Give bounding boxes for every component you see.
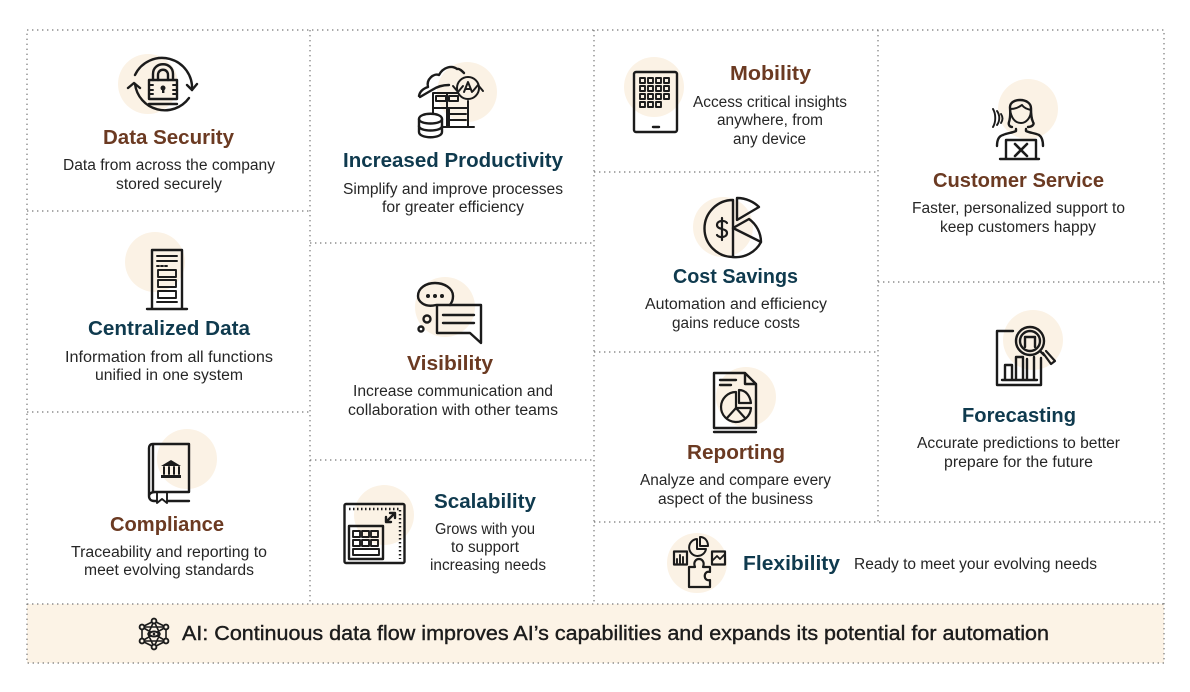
description: any device <box>733 131 806 148</box>
description <box>645 296 827 332</box>
description: aspect of the business <box>658 491 813 508</box>
heading: Centralized Data <box>88 318 251 340</box>
description: Traceability and reporting to <box>71 544 267 561</box>
heading: Reporting <box>687 442 785 464</box>
description: unified in one system <box>95 367 243 384</box>
heading: Mobility <box>730 63 812 85</box>
icon: scaling window <box>344 504 404 563</box>
panel: customer service <box>912 79 1125 236</box>
heading: Data Security <box>103 127 235 149</box>
description <box>348 383 558 419</box>
description: meet evolving standards <box>84 562 254 579</box>
heading: Visibility <box>407 353 494 375</box>
heading: Scalability <box>434 491 537 513</box>
icon: padlock with circular arrows <box>128 58 197 110</box>
description <box>693 94 847 148</box>
panel: centralized data <box>65 232 273 384</box>
AI banner background <box>27 604 1164 663</box>
icon: support agent <box>993 100 1043 159</box>
description <box>917 435 1120 471</box>
panel: reporting <box>640 367 831 508</box>
heading: Customer Service <box>933 170 1104 192</box>
description: Data from across the company <box>63 157 275 174</box>
description: Access critical insights <box>693 94 847 111</box>
heading: Increased Productivity <box>343 150 564 172</box>
description: anywhere, from <box>717 112 823 129</box>
description: collaboration with other teams <box>348 402 558 419</box>
description <box>912 200 1125 236</box>
panel: cost savings <box>645 197 827 332</box>
heading: Forecasting <box>962 405 1076 427</box>
description <box>640 472 831 508</box>
banner text: AI: Continuous data flow improves AI’s capabilities and expands its potential for automation <box>182 622 1049 645</box>
icon: cloud warehouse with database <box>419 67 483 137</box>
heading: Compliance <box>110 514 224 536</box>
description: for greater efficiency <box>382 199 524 216</box>
description: Analyze and compare every <box>640 472 831 489</box>
description: Ready to meet your evolving needs <box>854 556 1097 573</box>
description: prepare for the future <box>944 454 1093 471</box>
panel: forecasting <box>917 310 1120 471</box>
icon: tablet <box>634 72 677 132</box>
description: Faster, personalized support to <box>912 200 1125 217</box>
description: Information from all functions <box>65 349 273 366</box>
icon: AI network <box>140 619 168 649</box>
AI banner <box>140 619 1049 649</box>
description <box>343 181 563 216</box>
panel: scalability <box>344 485 546 574</box>
heading: Cost Savings <box>673 266 798 288</box>
panel: compliance <box>71 429 267 579</box>
description: to support <box>451 539 520 556</box>
icon: dollar pie chart <box>704 198 761 257</box>
description: gains reduce costs <box>672 315 800 332</box>
icon: chart with magnifier <box>997 327 1055 385</box>
description <box>65 349 273 384</box>
description: increasing needs <box>430 557 546 574</box>
panel: data security <box>63 54 275 193</box>
description: Increase communication and <box>353 383 553 400</box>
description <box>63 157 275 193</box>
panel: visibility <box>348 277 558 419</box>
description <box>71 544 267 579</box>
panel: flexibility <box>667 533 1097 593</box>
description <box>430 521 546 574</box>
description: Simplify and improve processes <box>343 181 563 198</box>
description: Automation and efficiency <box>645 296 827 313</box>
icon: puzzle piece with charts <box>674 537 725 587</box>
heading: Flexibility <box>743 553 841 575</box>
description: stored securely <box>116 176 222 193</box>
icon: server tower <box>147 250 187 309</box>
description: keep customers happy <box>940 219 1096 236</box>
icon: report document <box>714 373 756 432</box>
icon: speech bubbles <box>418 283 481 343</box>
panel: mobility <box>624 57 847 148</box>
description: Accurate predictions to better <box>917 435 1120 452</box>
icon: book with institution <box>149 444 189 503</box>
description: Grows with you <box>435 521 535 538</box>
panel: increased productivity <box>343 62 564 216</box>
